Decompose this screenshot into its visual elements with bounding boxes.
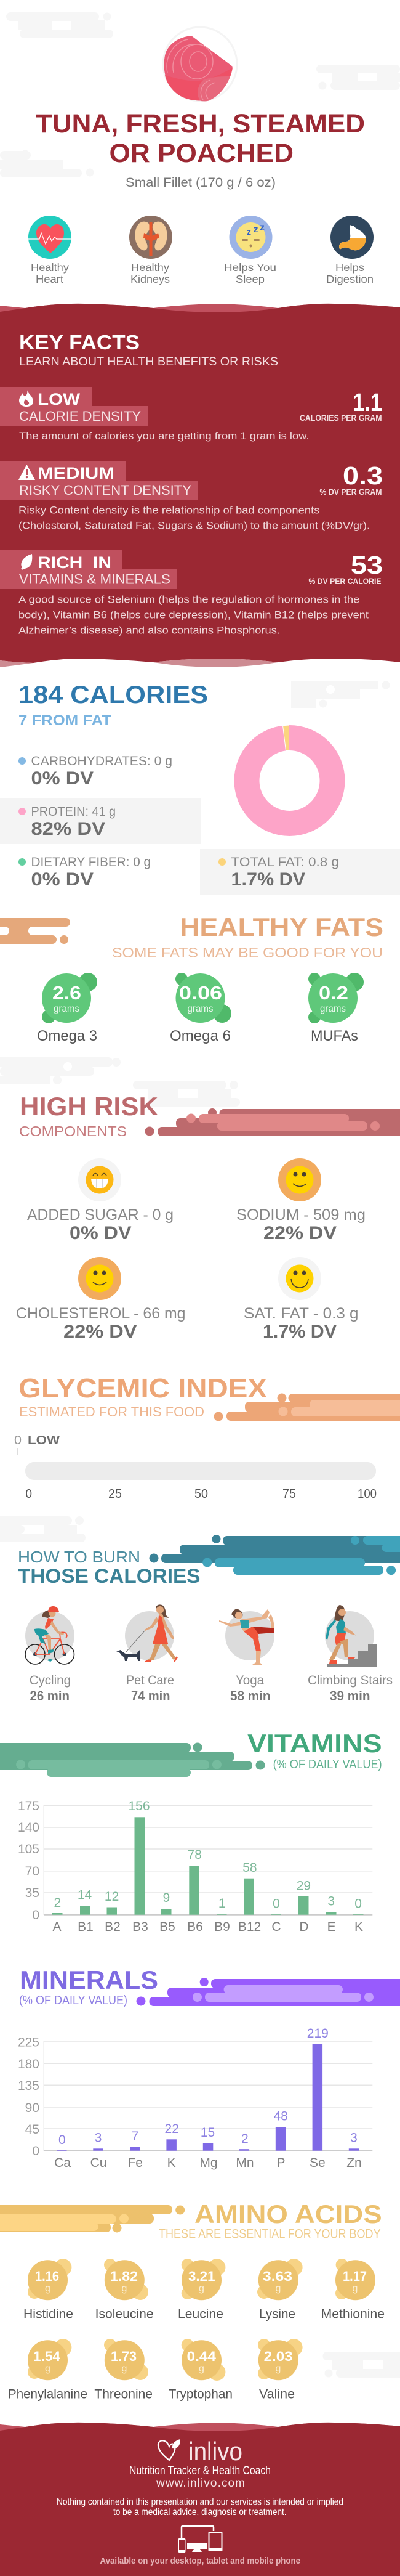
activity: pet care: 74 min — [131, 1688, 170, 1704]
bar chart: minerals: 2 — [241, 2132, 249, 2146]
amino acid: threonine: 1.73 — [111, 2349, 137, 2364]
heading: minerals: MINERALS — [20, 1965, 158, 1994]
bar chart: minerals: Mn — [236, 2156, 254, 2170]
amino acid: methionine: g — [353, 2283, 358, 2294]
bar chart: vitamins: 12 — [105, 1890, 119, 1904]
bar chart: vitamins: 0 — [273, 1897, 280, 1911]
label: healthy heart: Heart — [36, 273, 63, 285]
serving size subtitle: Small Fillet (170 g / 6 oz) — [126, 176, 276, 190]
bar chart: vitamins: 78 — [188, 1848, 202, 1862]
chart: glycemic index scale: 100 — [358, 1487, 377, 1501]
nutrient: total fat: TOTAL FAT: 0.8 g — [231, 855, 339, 869]
panel: footer — [0, 2423, 400, 2576]
heading: high risk components — [19, 1092, 158, 1139]
bar chart: vitamins: 0 — [354, 1897, 362, 1911]
bar chart: vitamins — [18, 1799, 372, 1934]
stat: mufas: 0.2 — [319, 982, 348, 1004]
bar chart: vitamins: B1 — [78, 1920, 94, 1934]
bar chart: minerals: 7 — [131, 2129, 138, 2143]
bar chart: minerals: Fe — [127, 2156, 143, 2170]
panel: key facts — [0, 304, 400, 667]
amino acid: methionine: Methionine — [321, 2307, 385, 2322]
activity: cycling — [25, 1606, 74, 1704]
icon: helps you sleep: z — [260, 222, 265, 233]
label: helps you sleep: Helps You — [224, 261, 276, 274]
activity: cycling: 26 min — [30, 1688, 70, 1704]
activity: climbing stairs: Climbing Stairs — [308, 1673, 393, 1688]
risk: added sugar: ADDED SUGAR - 0 g — [27, 1206, 174, 1224]
heading: healthy fats: HEALTHY FATS — [180, 912, 383, 941]
fact: medium risky content density: MEDIUM — [38, 464, 114, 482]
amino acid: valine — [258, 2339, 303, 2402]
nutrient: total fat — [200, 849, 400, 895]
amino acid: valine: g — [276, 2363, 281, 2374]
heading: healthy fats: SOME FATS MAY BE GOOD FOR YOU — [112, 945, 383, 961]
bar chart: minerals: 180 — [18, 2057, 39, 2071]
nutrient: carbohydrates: 0% DV — [31, 768, 94, 789]
heading: vitamins: VITAMINS — [247, 1729, 382, 1758]
image: tuna fillet — [163, 27, 237, 101]
nutrient: protein: 82% DV — [31, 819, 105, 839]
bar chart: minerals: Zn — [346, 2156, 362, 2170]
stat: mufas — [308, 973, 364, 1044]
heading: key facts: LEARN ABOUT HEALTH BENEFITS OR RISKS — [19, 356, 278, 368]
label: healthy kidneys: Kidneys — [130, 273, 170, 285]
fact: medium risky content density: % DV PER GRAM — [320, 487, 382, 497]
bar chart: vitamins: 2 — [54, 1896, 61, 1910]
amino acid: leucine: g — [199, 2283, 204, 2294]
amino acid: phenylalanine — [8, 2339, 87, 2402]
heading: key facts: KEY FACTS — [19, 331, 140, 354]
heading: key facts — [19, 331, 278, 368]
bar chart: minerals: Ca — [54, 2156, 71, 2170]
heading: high risk components: HIGH RISK — [20, 1092, 158, 1121]
amino acid: tryptophan: 0.44 — [187, 2349, 217, 2364]
fact: rich in vitamins and minerals: 53 — [351, 551, 383, 579]
icon: helps you sleep: z — [254, 224, 258, 235]
fact: low calorie density: The amount of calories you are getting from 1 gram is low. — [19, 430, 310, 442]
logo: inlivo — [158, 2437, 242, 2466]
chart: glycemic index scale: LOW — [28, 1434, 60, 1447]
amino acid: threonine: Threonine — [94, 2387, 153, 2402]
disclaimer: to be a medical advice, diagnosis or treatment. — [113, 2507, 287, 2517]
heading: how to burn those calories — [18, 1548, 201, 1587]
fact: rich in vitamins and minerals — [0, 550, 383, 636]
risk: added sugar: 0% DV — [70, 1223, 132, 1243]
nutrient: dietary fiber: DIETARY FIBER: 0 g — [31, 855, 151, 869]
header graphic: healthy fats — [0, 918, 78, 944]
icon: helps you sleep — [229, 216, 272, 259]
bar chart: vitamins: 9 — [162, 1891, 170, 1905]
fact: rich in vitamins and minerals: Alzheimer’s disease) and also contains Phosphorus. — [18, 625, 280, 636]
nutrient: protein — [0, 798, 201, 844]
amino acid: histidine: 1.16 — [35, 2269, 59, 2284]
stat: omega 6: grams — [187, 1004, 213, 1014]
bar chart: vitamins: 140 — [18, 1821, 39, 1835]
amino acid: threonine — [94, 2339, 153, 2402]
bar chart: vitamins: 3 — [327, 1895, 335, 1909]
stat: omega 3 — [37, 973, 97, 1044]
bar chart: vitamins: B6 — [187, 1920, 203, 1934]
amino acid: valine: Valine — [259, 2387, 295, 2402]
fact: rich in vitamins and minerals: RICH IN — [38, 553, 111, 572]
bar chart: vitamins: 35 — [25, 1886, 39, 1900]
icon: healthy heart — [28, 216, 71, 259]
stat: omega 3: 2.6 — [52, 982, 81, 1004]
activity: climbing stairs — [308, 1605, 393, 1704]
chart: glycemic index scale: 0 — [14, 1434, 22, 1447]
amino acid: leucine: Leucine — [178, 2307, 223, 2322]
heading: amino acids — [159, 2200, 382, 2241]
header graphic: amino acids — [0, 2205, 185, 2233]
fact: low calorie density: LOW — [38, 390, 81, 408]
title: TUNA, FRESH, STEAMED — [36, 109, 365, 139]
bar chart: minerals: 22 — [165, 2122, 179, 2136]
nutrient: total fat: 1.7% DV — [231, 869, 305, 890]
heading: how to burn those calories: THOSE CALORIES — [18, 1565, 201, 1587]
label: healthy kidneys: Healthy — [131, 261, 169, 274]
fact: medium risky content density: (Cholesterol, Saturated Fat, Sugars & Sodium) to the amount (%DV/gr). — [18, 520, 370, 531]
bar chart: vitamins: 175 — [18, 1799, 39, 1813]
activity: yoga: Yoga — [236, 1673, 264, 1688]
bar chart: minerals: K — [167, 2156, 176, 2170]
amino acid: isoleucine: 1.82 — [110, 2269, 138, 2284]
amino acid: isoleucine: g — [122, 2283, 127, 2294]
nutrient: protein: PROTEIN: 41 g — [31, 805, 116, 819]
bar chart: vitamins: 1 — [218, 1896, 226, 1911]
heading: vitamins — [247, 1729, 382, 1771]
stat: omega 6: 0.06 — [179, 982, 222, 1004]
bar chart: vitamins: 14 — [78, 1888, 92, 1903]
bar chart: minerals: Mg — [199, 2156, 218, 2170]
stat: mufas: grams — [320, 1004, 346, 1014]
heading: healthy fats — [112, 912, 383, 961]
chart: glycemic index scale: 25 — [108, 1487, 122, 1501]
bar chart: vitamins: K — [354, 1920, 363, 1934]
heading: 184 calories: 7 FROM FAT — [18, 712, 111, 729]
bar chart: vitamins: B12 — [238, 1920, 261, 1934]
risk: cholesterol: 22% DV — [63, 1322, 137, 1342]
amino acid: valine: 2.03 — [264, 2349, 293, 2364]
fact: low calorie density: 1.1 — [353, 388, 382, 416]
chart: glycemic index scale — [14, 1434, 377, 1501]
fact: low calorie density: CALORIES PER GRAM — [300, 413, 382, 423]
risk: saturated fat — [244, 1257, 358, 1342]
bar chart: minerals: 15 — [201, 2126, 215, 2140]
tagline and website: Nutrition Tracker & Health Coach — [129, 2464, 271, 2477]
bar chart: minerals: 3 — [95, 2131, 102, 2145]
risk: saturated fat: SAT. FAT - 0.3 g — [244, 1305, 358, 1322]
risk: sodium: 22% DV — [263, 1223, 337, 1243]
bar chart: vitamins: B9 — [214, 1920, 230, 1934]
header graphic: minerals — [137, 1978, 400, 2006]
stat: omega 3: grams — [54, 1004, 79, 1014]
heading: glycemic index: GLYCEMIC INDEX — [18, 1373, 267, 1404]
bar chart: minerals: 219 — [307, 2026, 329, 2041]
heading: how to burn those calories: HOW TO BURN — [18, 1548, 140, 1566]
amino acid: tryptophan: Tryptophan — [169, 2387, 233, 2402]
amino acid: methionine — [321, 2259, 385, 2322]
risk: cholesterol — [16, 1257, 186, 1342]
risk: cholesterol: CHOLESTEROL - 66 mg — [16, 1305, 186, 1322]
activity: pet care: Pet Care — [126, 1673, 174, 1688]
bar chart: vitamins: E — [327, 1920, 336, 1934]
amino acid: threonine: g — [122, 2363, 127, 2374]
bar chart: minerals: Se — [310, 2156, 326, 2170]
bar chart: vitamins: B5 — [159, 1920, 175, 1934]
icon: devices — [178, 2526, 223, 2553]
stat: mufas: MUFAs — [311, 1028, 358, 1044]
heading: high risk components: COMPONENTS — [19, 1123, 127, 1139]
label: helps digestion: Helps — [335, 261, 364, 274]
amino acid: leucine: 3.21 — [188, 2269, 215, 2284]
header graphic: glycemic index — [214, 1394, 400, 1421]
bar chart: minerals: 90 — [25, 2101, 39, 2115]
availability note: Available on your desktop, tablet and mobile phone — [100, 2556, 300, 2566]
heading: minerals: (% OF DAILY VALUE) — [19, 1994, 127, 2007]
bar chart: vitamins: 58 — [242, 1861, 257, 1875]
bar chart: vitamins: 0 — [32, 1908, 39, 1922]
icon: helps you sleep: z — [247, 227, 251, 237]
amino acid: lysine: 3.63 — [263, 2269, 292, 2284]
heading: vitamins: (% OF DAILY VALUE) — [273, 1758, 382, 1771]
activity: cycling: Cycling — [30, 1673, 71, 1688]
amino acid: lysine — [257, 2259, 303, 2322]
label: helps digestion: Digestion — [326, 273, 374, 285]
fact: medium risky content density: Risky Content density is the relationship of bad components — [18, 504, 320, 516]
bar chart: vitamins: B2 — [105, 1920, 121, 1934]
stat: omega 3: Omega 3 — [37, 1028, 97, 1044]
risk: sodium: SODIUM - 509 mg — [236, 1206, 366, 1224]
bar chart: vitamins: 105 — [18, 1842, 39, 1856]
title — [36, 109, 365, 168]
title: OR POACHED — [110, 139, 294, 168]
amino acid: leucine — [178, 2259, 225, 2322]
amino acid: phenylalanine: 1.54 — [33, 2349, 61, 2364]
bar chart: vitamins: 29 — [297, 1879, 311, 1893]
bar chart: vitamins: A — [52, 1920, 62, 1934]
amino acid: histidine: g — [45, 2283, 50, 2294]
chart: glycemic index scale: 50 — [194, 1487, 208, 1501]
amino acid: tryptophan: g — [199, 2363, 204, 2374]
stat: omega 6: Omega 6 — [170, 1028, 231, 1044]
disclaimer: Nothing contained in this presentation and our services is intended or implied — [57, 2497, 343, 2508]
amino acid: methionine: 1.17 — [343, 2269, 367, 2284]
bar chart: minerals: 0 — [32, 2144, 39, 2158]
nutrient: carbohydrates — [18, 754, 172, 789]
activity: climbing stairs: 39 min — [330, 1688, 370, 1704]
fact: rich in vitamins and minerals: VITAMINS & MINERALS — [19, 572, 170, 587]
header graphic: high risk — [145, 1108, 400, 1136]
chart: glycemic index scale: 75 — [282, 1487, 296, 1501]
bar chart: minerals — [18, 2026, 372, 2170]
risk: sodium — [236, 1158, 366, 1243]
donut chart: calorie sources — [247, 725, 332, 823]
activity: yoga — [219, 1609, 274, 1704]
bar chart: vitamins: 156 — [128, 1799, 150, 1813]
heading: 184 calories — [18, 681, 208, 729]
bar chart: vitamins: D — [299, 1920, 309, 1934]
nutrient: dietary fiber: 0% DV — [31, 869, 94, 890]
heading: 184 calories: 184 CALORIES — [18, 681, 208, 709]
bar chart: minerals: Cu — [90, 2156, 106, 2170]
amino acid: phenylalanine: g — [45, 2363, 50, 2374]
fact: low calorie density — [0, 387, 382, 442]
header graphic: vitamins — [0, 1742, 265, 1777]
logo: inlivo: inlivo — [188, 2437, 242, 2466]
tagline and website: www.inlivo.com — [156, 2477, 245, 2490]
bar chart: minerals: 0 — [58, 2133, 66, 2147]
chart: glycemic index scale: 0 — [26, 1487, 32, 1501]
amino acid: lysine: Lysine — [259, 2307, 295, 2322]
tagline and website — [129, 2464, 271, 2490]
fact: medium risky content density — [0, 461, 383, 531]
amino acid: lysine: g — [276, 2283, 281, 2294]
bar chart: vitamins: 70 — [25, 1864, 39, 1879]
amino acid: isoleucine: Isoleucine — [95, 2307, 154, 2322]
heading: amino acids: AMINO ACIDS — [194, 2200, 382, 2229]
bar chart: minerals: 135 — [18, 2079, 39, 2093]
activity: yoga: 58 min — [230, 1688, 271, 1704]
heading: glycemic index: ESTIMATED FOR THIS FOOD — [19, 1404, 204, 1420]
amino acid: histidine: Histidine — [23, 2307, 73, 2322]
bar chart: minerals: 48 — [274, 2110, 288, 2124]
activity: pet care — [116, 1604, 178, 1704]
bar chart: minerals: P — [276, 2156, 286, 2170]
bar chart: minerals: 45 — [25, 2123, 39, 2137]
label: healthy heart: Healthy — [31, 261, 69, 274]
fact: medium risky content density: 0.3 — [343, 461, 383, 490]
stat: omega 6 — [170, 973, 231, 1044]
amino acid: tryptophan — [169, 2339, 233, 2402]
bar chart: vitamins: B3 — [132, 1920, 148, 1934]
nutrient: dietary fiber — [18, 855, 151, 890]
risk: added sugar — [27, 1158, 174, 1243]
icon: healthy kidneys — [129, 216, 172, 259]
heading: minerals — [19, 1965, 158, 2007]
fact: low calorie density: CALORIE DENSITY — [19, 408, 141, 424]
bar chart: minerals: 225 — [18, 2036, 39, 2049]
amino acid: isoleucine — [95, 2259, 154, 2322]
nutrient: carbohydrates: CARBOHYDRATES: 0 g — [31, 754, 172, 768]
risk: saturated fat: 1.7% DV — [263, 1322, 337, 1342]
icon: helps digestion — [330, 216, 374, 259]
fact: medium risky content density: RISKY CONTENT DENSITY — [19, 482, 191, 498]
amino acid: histidine — [23, 2259, 73, 2322]
label: helps you sleep: Sleep — [236, 273, 265, 285]
bar chart: minerals: 3 — [350, 2131, 358, 2145]
fact: rich in vitamins and minerals: A good source of Selenium (helps the regulation of hormones in the — [18, 594, 359, 605]
fact: rich in vitamins and minerals: % DV PER CALORIE — [309, 576, 382, 586]
fact: rich in vitamins and minerals: body), Vitamin B6 (helps cure depression), Vitamin B12 (helps prevent — [18, 609, 369, 621]
amino acid: phenylalanine: Phenylalanine — [8, 2387, 87, 2402]
heading: glycemic index — [18, 1373, 267, 1420]
header graphic: how to burn — [149, 1535, 400, 1575]
bar chart: vitamins: C — [271, 1920, 281, 1934]
